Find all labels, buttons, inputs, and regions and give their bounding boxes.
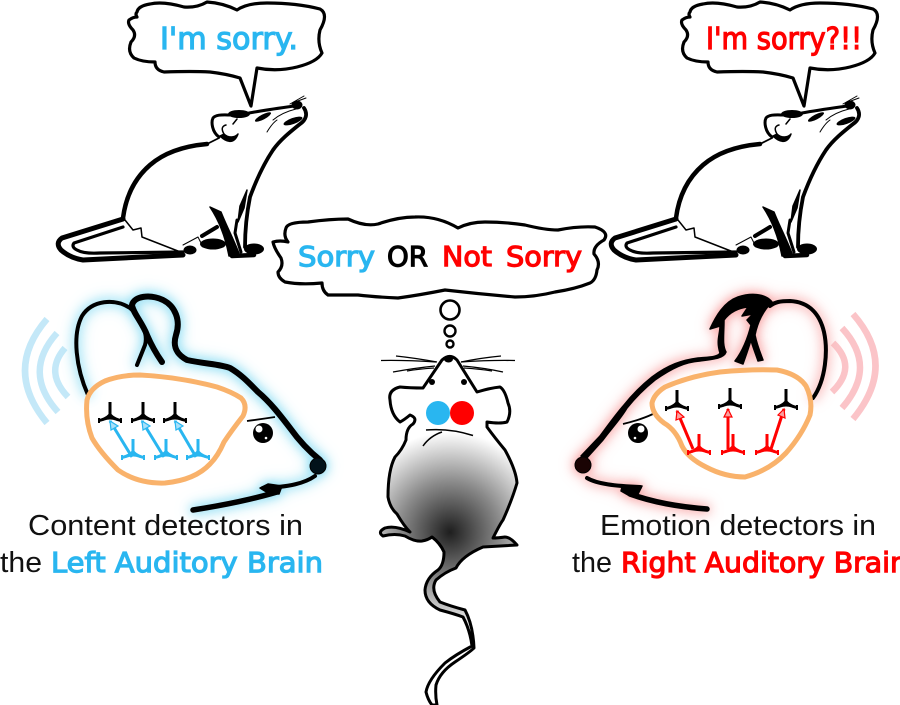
text: Sorry OR Not Sorry: Sorry [298, 240, 375, 273]
blue connection arrows [110, 421, 196, 457]
left caption: Content detectors in [28, 510, 303, 542]
red connection arrows [676, 409, 785, 449]
left rat sitting upright [58, 96, 306, 260]
right caption: the [572, 547, 612, 579]
central thought bubble [273, 217, 606, 298]
text: Sorry OR Not Sorry [298, 240, 582, 273]
right speech bubble [682, 2, 878, 106]
left mouse eye and brow [247, 417, 275, 443]
right auditory brain region [652, 370, 811, 477]
speech text: I'm sorry?!!: I'm sorry?!! [706, 22, 862, 57]
right caption: Emotion detectors in [600, 510, 876, 542]
text: Sorry OR Not Sorry: OR [387, 240, 428, 273]
left mouse head outline with blue glow [76, 297, 326, 510]
content detector neurons, black [99, 402, 186, 423]
thought circles [440, 300, 460, 348]
blue brain dot [426, 401, 450, 425]
sound waves, left [25, 319, 68, 423]
emotion detector neurons, red [688, 434, 778, 455]
left caption: the [0, 547, 42, 579]
speech text: I'm sorry.: I'm sorry. [160, 22, 298, 57]
eyes [429, 379, 467, 385]
content detector neurons, blue [122, 439, 209, 460]
right mouse head outline with red glow [575, 294, 826, 509]
whiskers [381, 356, 515, 372]
central mouse seen from above [380, 356, 517, 705]
red brain dot [450, 401, 474, 425]
right caption [572, 510, 900, 579]
right rat sitting upright [611, 96, 859, 260]
emotion detector neurons, black [666, 388, 797, 411]
left caption: Left Auditory Brain [51, 546, 323, 579]
nose [444, 356, 453, 362]
left speech bubble [128, 2, 324, 106]
left auditory brain region [87, 375, 245, 483]
sound waves, right [832, 314, 876, 419]
left caption [0, 510, 323, 579]
text: Sorry OR Not Sorry: Not [442, 240, 492, 273]
text: Sorry OR Not Sorry: Sorry [506, 240, 582, 273]
right mouse eye and brow [623, 414, 653, 443]
right caption: Right Auditory Brain [621, 546, 900, 579]
neck lines [423, 430, 473, 446]
